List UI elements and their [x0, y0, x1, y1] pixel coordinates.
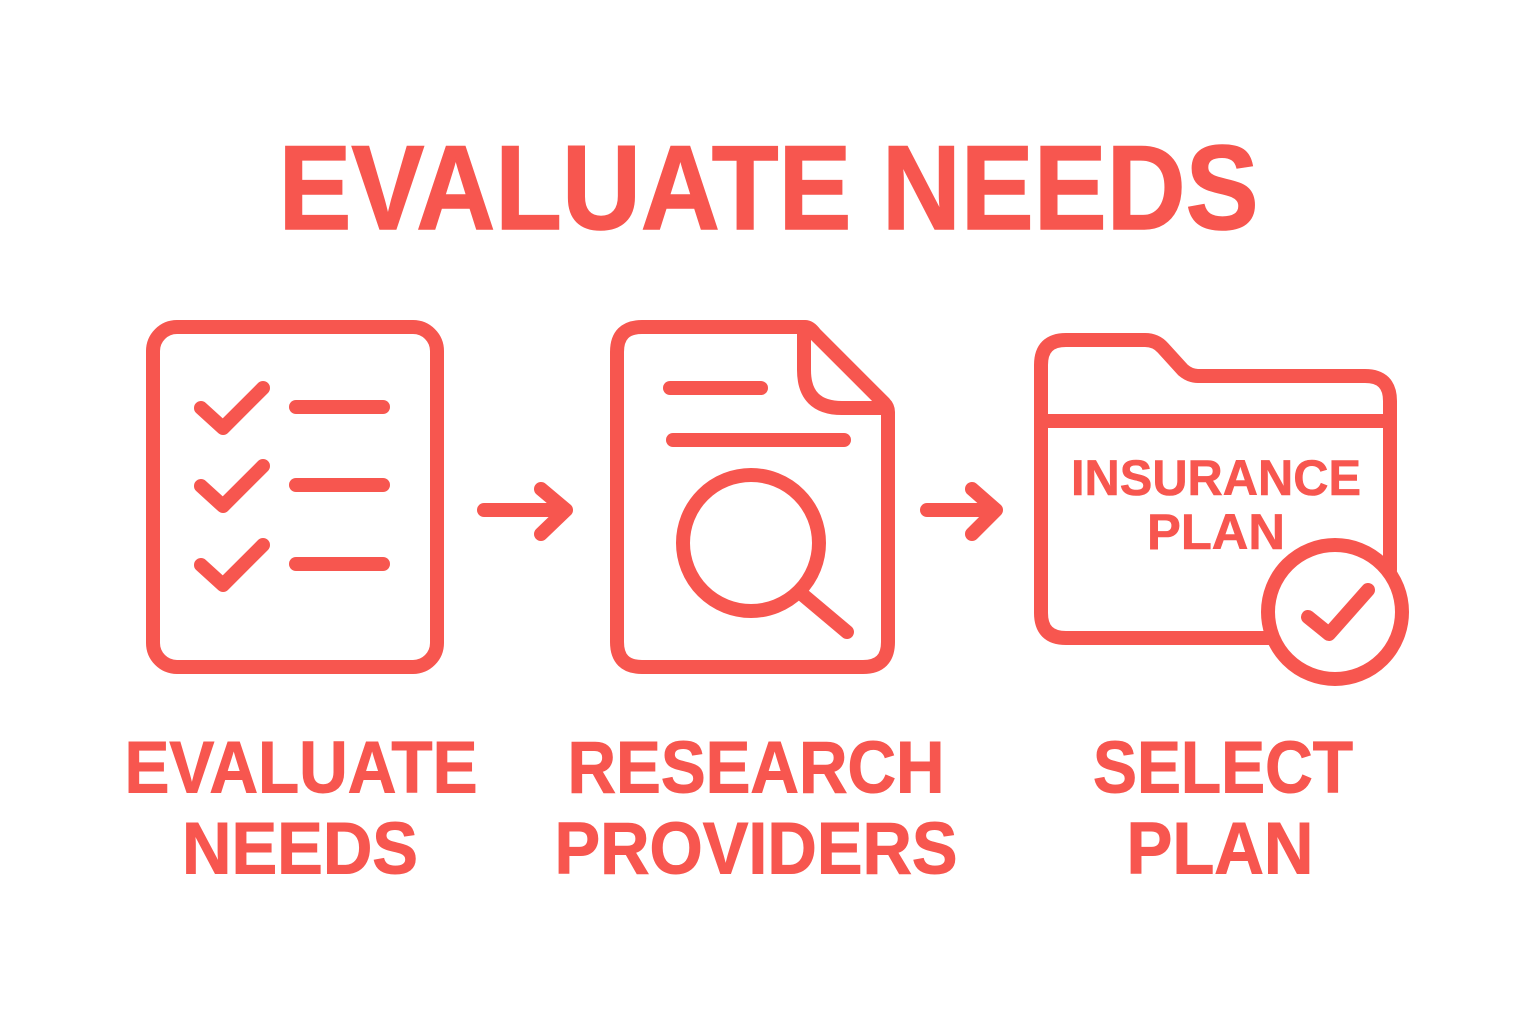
label: research providers: PROVIDERS: [554, 808, 958, 890]
label: evaluate needs: NEEDS: [182, 808, 418, 890]
label: select plan: SELECT: [1093, 728, 1353, 808]
arrow: step two to step three: [927, 489, 996, 534]
icon: insurance plan folder: [1041, 340, 1402, 679]
title: EVALUATE NEEDS: [278, 121, 1258, 255]
label: evaluate needs: EVALUATE: [124, 728, 478, 808]
icon: check badge: [1268, 545, 1402, 679]
arrow: step one to step two: [484, 489, 566, 534]
icon: checklist: [153, 327, 437, 667]
label: select plan: PLAN: [1126, 808, 1314, 890]
label: evaluate needs: [124, 728, 478, 890]
label: insurance plan: INSURANCE: [1071, 450, 1361, 506]
label: research providers: RESEARCH: [568, 728, 944, 808]
label: select plan: [1093, 728, 1353, 890]
label: research providers: [554, 728, 958, 890]
label: plan in folder: PLAN: [1147, 504, 1285, 560]
icon: document with magnifying glass: [617, 327, 888, 667]
